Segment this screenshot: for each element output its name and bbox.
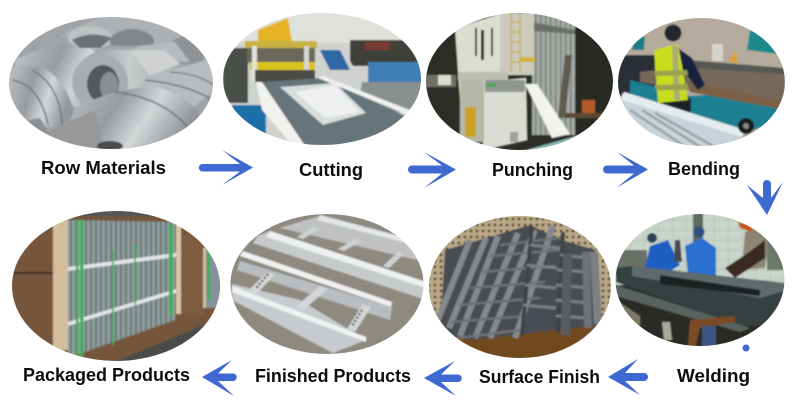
label: Bending: Bending (668, 159, 740, 179)
photo: raw material steel coils (9, 17, 213, 149)
photo: packaged products (10, 208, 222, 364)
arrow: Welding to Surface Finish (608, 359, 648, 395)
arrow: Finished to Packaged Products (202, 360, 237, 396)
arrow: Cutting to Punching (408, 152, 456, 188)
arrow: Row Materials to Cutting (199, 150, 253, 185)
label: Finished Products: Finished Products (255, 366, 411, 386)
photo: welding workers (616, 214, 784, 346)
dot: blue marker (742, 344, 750, 352)
arrow: Bending to Welding (747, 180, 783, 215)
label: Punching: Punching (492, 160, 573, 180)
photo: surface finished ladder racks (426, 212, 616, 362)
arrow: Punching to Bending (603, 152, 648, 188)
label: Surface Finish: Surface Finish (479, 367, 600, 387)
label: Welding: Welding (677, 366, 750, 386)
photo: bending machine with worker (615, 15, 790, 150)
arrow: Surface Finish to Finished Products (424, 361, 462, 396)
label: Row Materials: Row Materials (41, 158, 166, 178)
label: Packaged Products: Packaged Products (23, 365, 190, 385)
photo: punching machine (424, 10, 616, 154)
photo: finished cable ladder trays (228, 212, 426, 357)
photo: cutting machine (220, 10, 425, 150)
label: Cutting: Cutting (299, 160, 363, 180)
